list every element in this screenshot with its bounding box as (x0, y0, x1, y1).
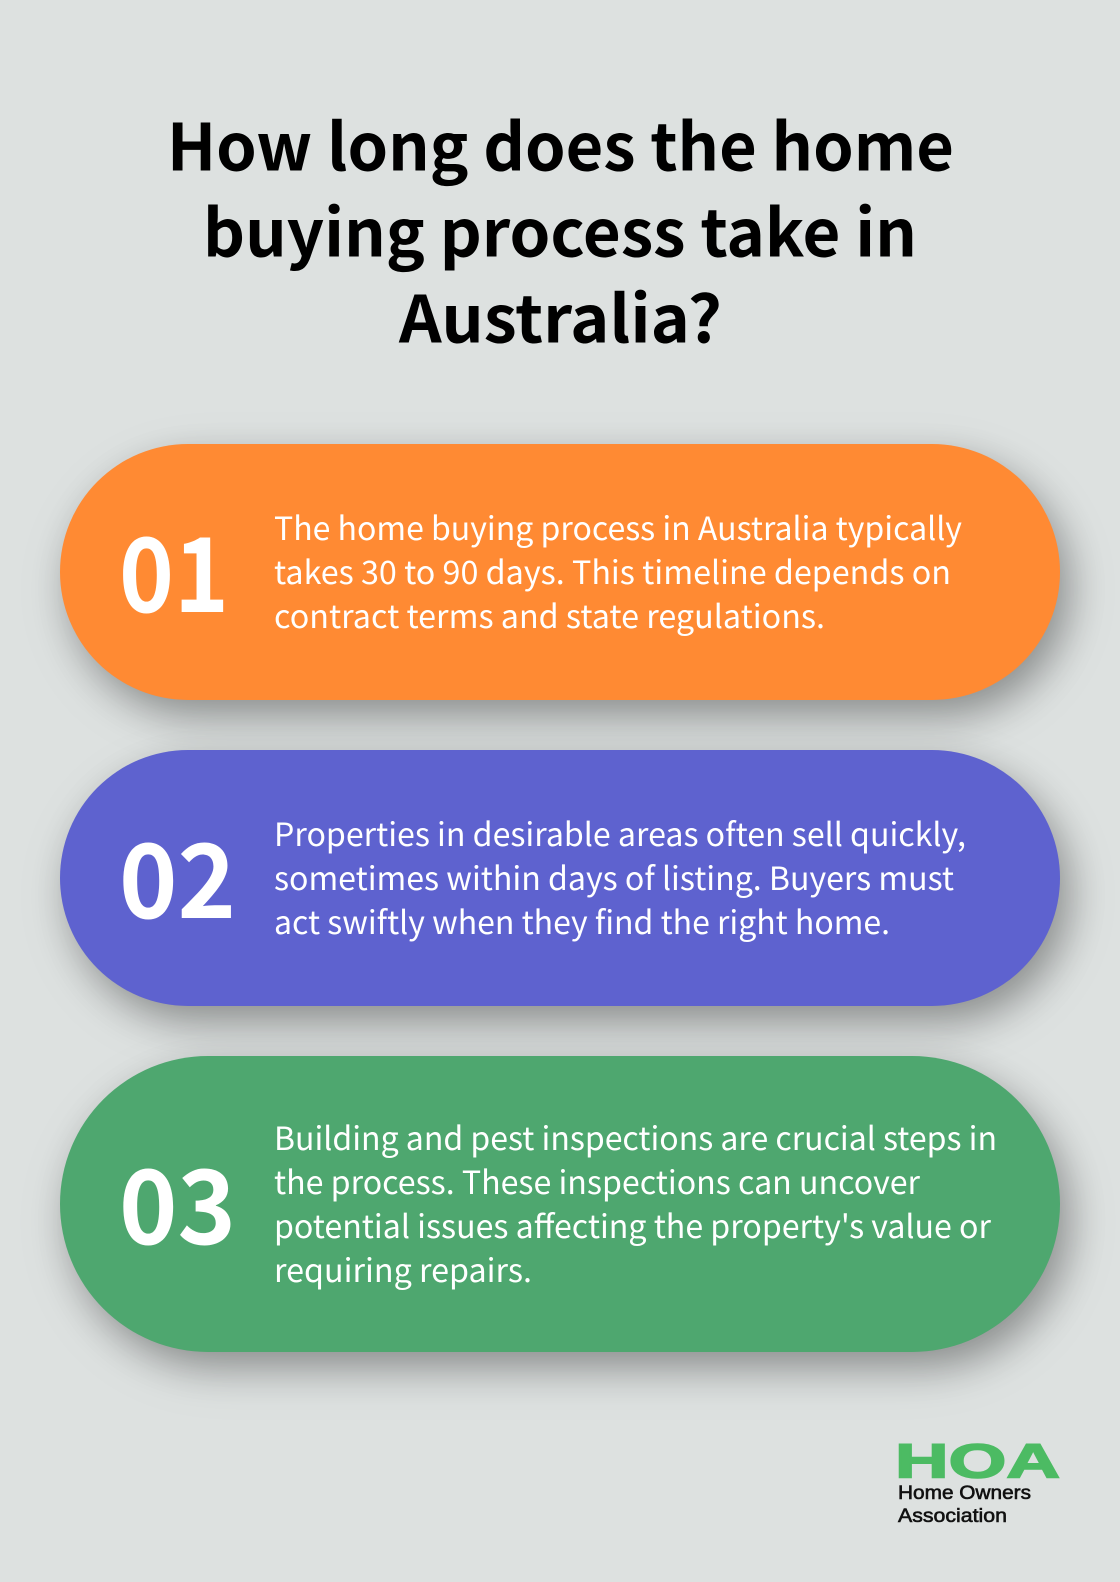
step 01 text: takes 30 to 90 days. This timeline depends on (274, 548, 951, 594)
step 01 text: contract terms and state regulations. (274, 592, 825, 638)
logo wordmark: Association (898, 1505, 1007, 1527)
title: Australia? (398, 268, 722, 362)
title: buying process take in (203, 182, 917, 276)
step 03 text (274, 1114, 997, 1292)
step 03 text: the process. These inspections can uncover (274, 1158, 921, 1204)
logo mark HOA: HOA (895, 1434, 1060, 1488)
logo: Home Owners Association (895, 1434, 1060, 1527)
logo wordmark: Home Owners (898, 1482, 1031, 1504)
step 03 text: Building and pest inspections are crucial steps in (274, 1114, 997, 1160)
step number 02: 02 (119, 799, 236, 948)
panel: step 01 (60, 444, 1070, 718)
panel: step 03 (60, 1056, 1070, 1370)
step 02 text: Properties in desirable areas often sell quickly, (274, 810, 966, 856)
panel: step 02 (60, 750, 1070, 1024)
step 02 text: sometimes within days of listing. Buyers must (274, 854, 954, 900)
step 03 text: requiring repairs. (274, 1246, 532, 1292)
step number 01: 01 (119, 493, 229, 642)
step 01 text (274, 504, 962, 638)
step number 03: 03 (119, 1125, 236, 1274)
step 01 text: The home buying process in Australia typically (274, 504, 962, 550)
title (167, 96, 954, 362)
step 02 text: act swiftly when they find the right home. (274, 898, 890, 944)
title: How long does the home (167, 96, 954, 190)
step 02 text (274, 810, 966, 944)
step 03 text: potential issues affecting the property's value or (274, 1202, 992, 1248)
logo wordmark (898, 1482, 1031, 1527)
